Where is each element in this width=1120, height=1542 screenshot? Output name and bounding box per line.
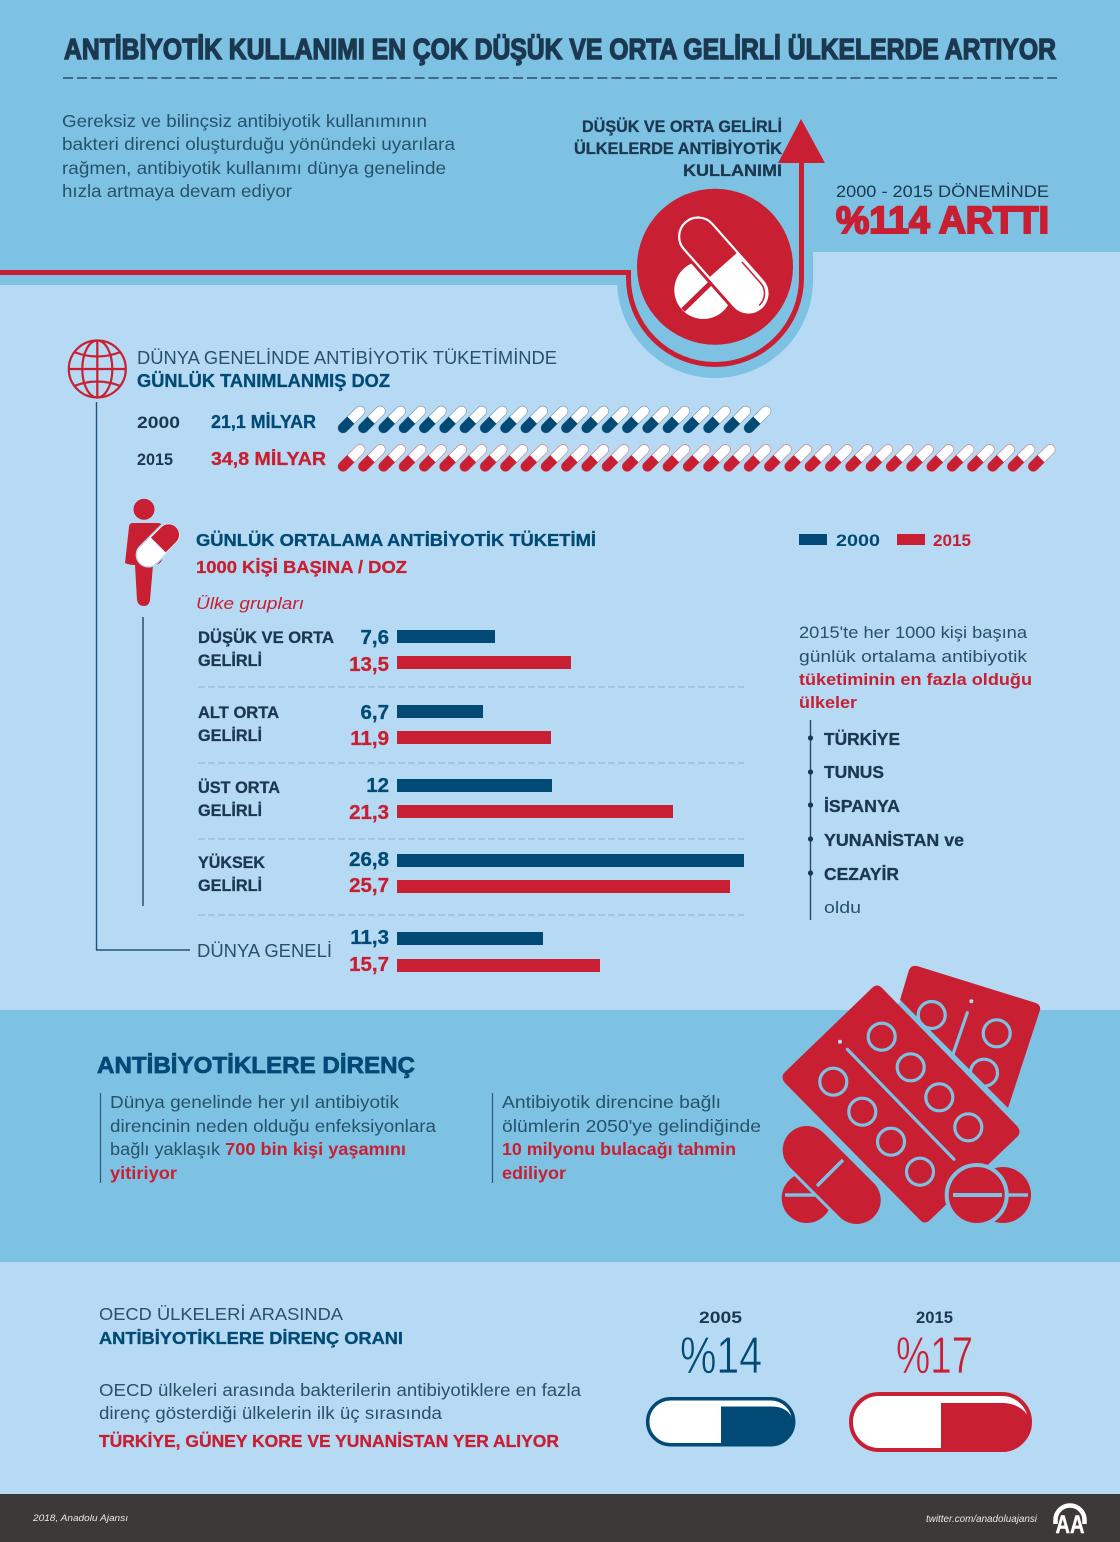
- bar chart: antibiotic consumption by income group: [197, 626, 744, 976]
- bar chart: antibiotic consumption by income group: 15,7: [349, 953, 389, 976]
- stat: 2005: 2005: [699, 1309, 742, 1327]
- intro text: Gereksiz ve bilinçsiz antibiyotik kullanımının: [62, 111, 427, 131]
- capsule 2015: [851, 1394, 1030, 1451]
- back blister pack: [900, 966, 1040, 1108]
- callout: usage label: KULLANIMI: [683, 162, 782, 180]
- callout: 114 percent increase: 2000 - 2015 DÖNEMİNDE: [836, 182, 1049, 201]
- bar chart: antibiotic consumption by income group: DÜŞÜK VE ORTA: [198, 628, 334, 647]
- country list: İSPANYA: [824, 796, 900, 816]
- icon: blister packs and tablets: [782, 966, 1040, 1225]
- side note: highest consumption countries: günlük ortalama antibiyotik: [799, 647, 1028, 666]
- row: 2015 dose: [137, 448, 326, 469]
- stat: 2005: [648, 1309, 794, 1445]
- callout: 114 percent increase: %114 ARTTI: [836, 200, 1049, 242]
- row: 2015 dose: 2015: [137, 451, 173, 469]
- heading: daily defined dose: [137, 348, 557, 391]
- heading: OECD resistance rate: [99, 1304, 403, 1348]
- side note: highest consumption countries: ülkeler: [799, 693, 857, 712]
- text block: OECD top three: [99, 1380, 581, 1451]
- side note: highest consumption countries: 2015'te her 1000 kişi başına: [799, 623, 1028, 642]
- intro text: rağmen, antibiyotik kullanımı dünya genelinde: [62, 158, 446, 178]
- country list: oldu: [824, 898, 861, 917]
- intro text: hızla artmaya devam ediyor: [62, 181, 292, 201]
- row: 2000 dose: 21,1 MİLYAR: [211, 411, 316, 432]
- heading: daily defined dose: GÜNLÜK TANIMLANMIŞ DOZ: [137, 371, 390, 391]
- pictogram: 2015 pills: [336, 442, 1057, 474]
- country list: TUNUS: [824, 762, 884, 782]
- text block: 10 million by 2050: 10 milyonu bulacağı tahmin: [502, 1139, 736, 1159]
- logo: Anadolu Ajansı: [1056, 1506, 1084, 1539]
- pictogram: 2000 pills: [336, 404, 773, 435]
- text block: 700 thousand deaths: [100, 1092, 436, 1183]
- row: 2000 dose: 2000: [137, 414, 180, 432]
- bar chart: antibiotic consumption by income group: ALT ORTA: [198, 704, 279, 722]
- text block: 10 million by 2050: ediliyor: [502, 1163, 566, 1183]
- tablets right: [947, 1165, 1031, 1225]
- panel: resistance band: [0, 1010, 1120, 1262]
- text block: 10 million by 2050: Antibiyotik direncine bağlı: [502, 1092, 721, 1112]
- stat: 2015: 2015: [916, 1309, 953, 1327]
- text block: 10 million by 2050: [492, 1092, 761, 1183]
- stat: 2015: %17: [896, 1327, 973, 1385]
- bar chart: antibiotic consumption by income group: 13,5: [349, 653, 389, 676]
- intro text: [62, 111, 455, 201]
- heading: average daily consumption: [196, 530, 596, 613]
- bar chart: antibiotic consumption by income group: 25,7: [349, 874, 389, 897]
- bar chart: antibiotic consumption by income group: GELİRLİ: [198, 802, 262, 820]
- heading: average daily consumption: Ülke grupları: [196, 594, 304, 613]
- heading: average daily consumption: 1000 KİŞİ BAŞINA / DOZ: [196, 557, 407, 577]
- bar chart: antibiotic consumption by income group: ÜST ORTA: [198, 778, 280, 797]
- legend: 2000: [836, 531, 880, 550]
- bar chart: antibiotic consumption by income group: 11,3: [350, 926, 389, 949]
- connector line under person: [142, 617, 144, 906]
- footer: 2018, Anadolu Ajansı: [32, 1513, 128, 1524]
- row: 2015 dose: 34,8 MİLYAR: [211, 448, 326, 469]
- icon: pill in red circle: [637, 189, 793, 345]
- bar chart: antibiotic consumption by income group: YÜKSEK: [198, 853, 265, 872]
- front blister pack: [782, 986, 1020, 1222]
- legend: 2015: [933, 531, 971, 550]
- connector line from globe to world row: [96, 402, 190, 950]
- stat: 2015: [851, 1309, 1030, 1451]
- bar chart: antibiotic consumption by income group: 21,3: [349, 801, 389, 824]
- heading: OECD resistance rate: ANTİBİYOTİKLERE DİRENÇ ORANI: [99, 1328, 403, 1348]
- footer: twitter.com/anadoluajansi: [926, 1513, 1038, 1525]
- bar chart: antibiotic consumption by income group: 6,7: [360, 701, 389, 724]
- bar chart: antibiotic consumption by income group: GELİRLİ: [198, 727, 262, 745]
- side note: highest consumption countries: [799, 623, 1032, 920]
- side note: highest consumption countries: tüketiminin en fazla olduğu: [799, 670, 1032, 689]
- bar chart: antibiotic consumption by income group: 26,8: [349, 848, 389, 871]
- intro text: bakteri direnci oluşturduğu yönündeki uyarılara: [62, 134, 455, 154]
- callout: 114 percent increase: [836, 182, 1049, 242]
- text block: 10 million by 2050: ölümlerin 2050'ye gelindiğinde: [502, 1116, 761, 1136]
- text block: OECD top three: OECD ülkeleri arasında bakterilerin antibiyotiklere en fazla: [99, 1380, 581, 1400]
- country list: [808, 720, 964, 920]
- row: 2000 dose: [137, 411, 316, 432]
- country list: TÜRKİYE: [824, 729, 900, 749]
- legend: [799, 531, 971, 550]
- heading: resistance: ANTİBİYOTİKLERE DİRENÇ: [97, 1052, 415, 1078]
- text block: 700 thousand deaths: direncinin neden olduğu enfeksiyonlara: [110, 1116, 436, 1136]
- stat: 2005: %14: [680, 1327, 762, 1385]
- bar chart: antibiotic consumption by income group: GELİRLİ: [198, 877, 262, 895]
- capsule 2005: [648, 1399, 794, 1445]
- header band: [0, 0, 1120, 378]
- text block: 700 thousand deaths: yitiriyor: [110, 1163, 177, 1183]
- callout: usage label: DÜŞÜK VE ORTA GELİRLİ: [582, 117, 782, 136]
- text block: 700 thousand deaths: bağlı yaklaşık 700 bin kişi yaşamını: [110, 1139, 406, 1159]
- heading: daily defined dose: DÜNYA GENELİNDE ANTİBİYOTİK TÜKETİMİNDE: [137, 348, 557, 368]
- country list: YUNANİSTAN ve: [824, 830, 964, 850]
- bar chart: antibiotic consumption by income group: 12: [366, 774, 389, 797]
- text block: 700 thousand deaths: Dünya genelinde her yıl antibiyotik: [110, 1092, 399, 1112]
- footer: [0, 1494, 1120, 1542]
- growth arrow line: [0, 119, 825, 364]
- text block: OECD top three: direnç gösterdiği ülkelerin ilk üç sırasında: [99, 1403, 442, 1423]
- bar chart: antibiotic consumption by income group: 7,6: [360, 626, 389, 649]
- icon: globe: [69, 340, 126, 398]
- bar chart: antibiotic consumption by income group: 11,9: [350, 727, 389, 750]
- text block: OECD top three: TÜRKİYE, GÜNEY KORE VE YUNANİSTAN YER ALIYOR: [99, 1431, 559, 1451]
- heading: average daily consumption: GÜNLÜK ORTALAMA ANTİBİYOTİK TÜKETİMİ: [196, 530, 596, 550]
- icon: person holding pill: [125, 499, 185, 606]
- country list: CEZAYİR: [824, 864, 899, 884]
- bar chart: antibiotic consumption by income group: GELİRLİ: [198, 652, 262, 670]
- callout: usage label: [574, 117, 782, 180]
- heading: OECD resistance rate: OECD ÜLKELERİ ARASINDA: [99, 1304, 343, 1324]
- logo: Anadolu Ajansı: AA: [1056, 1511, 1084, 1539]
- bar chart: antibiotic consumption by income group: DÜNYA GENELİ: [197, 941, 332, 961]
- tablet and capsule left: [782, 1150, 857, 1223]
- callout: usage label: ÜLKELERDE ANTİBİYOTİK: [574, 139, 782, 158]
